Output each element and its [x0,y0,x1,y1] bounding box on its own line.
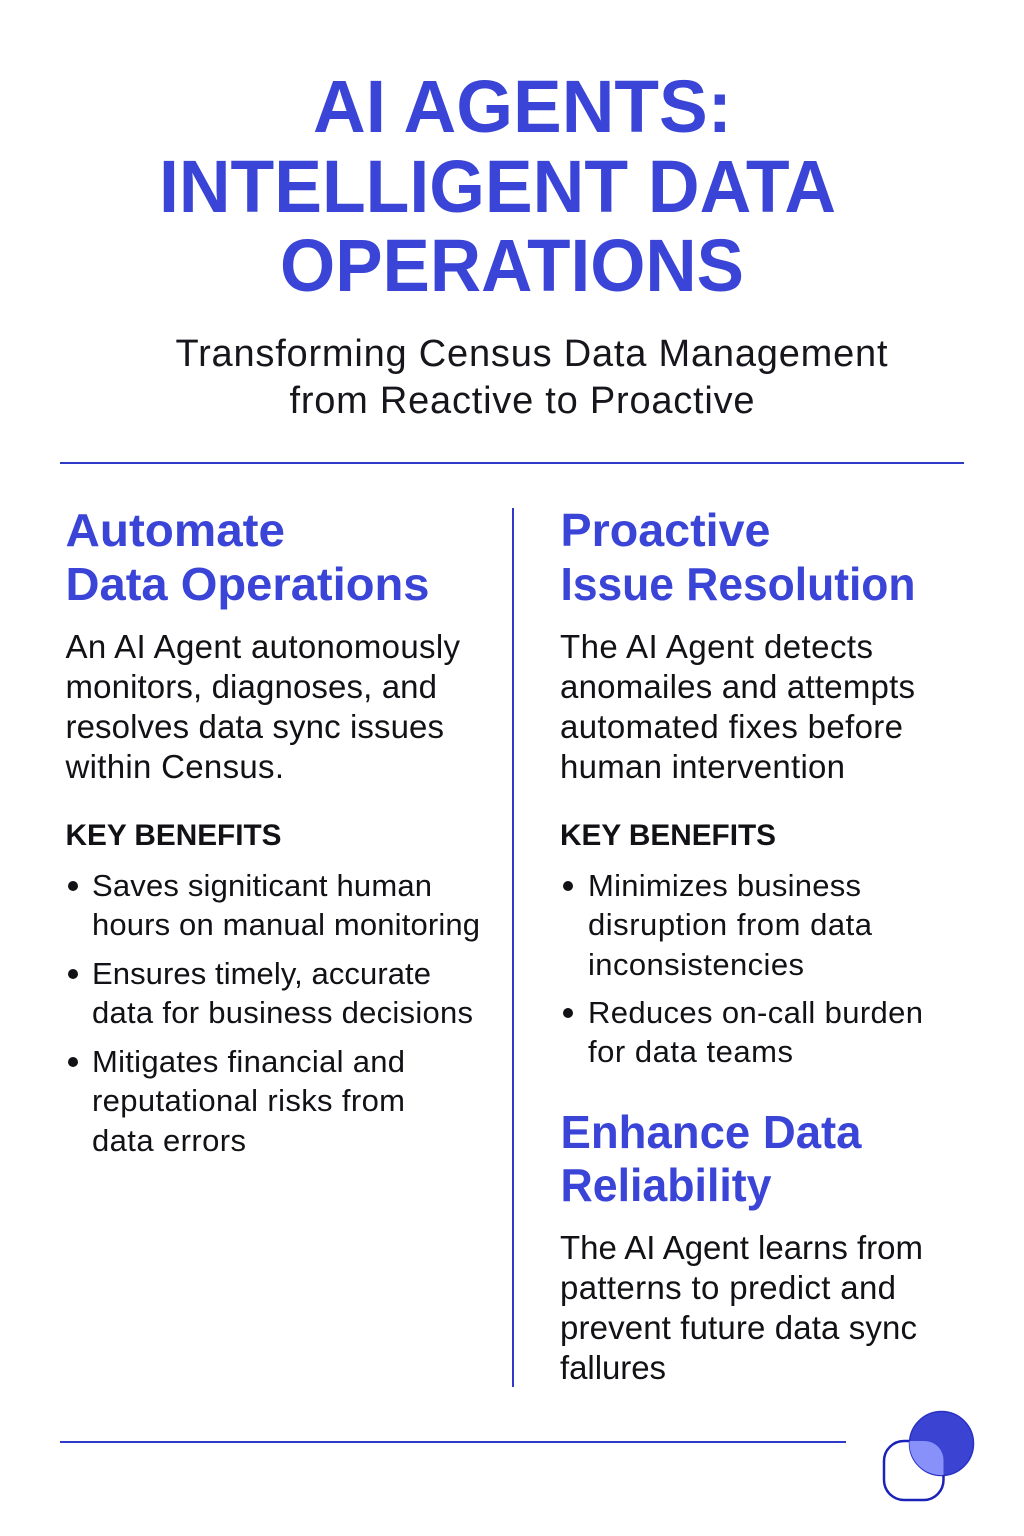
text block: proactive description: automated fixes before [560,708,903,745]
title: OPERATIONS [280,224,744,307]
text block: proactive description: anomailes and attempts [560,668,915,705]
list: left benefits: hours on manual monitoring [92,907,480,942]
heading: automate data operations: Automate [66,504,285,556]
text block: automate description: within Census. [64,748,284,785]
text block: automate description: An AI Agent autonomously [66,628,460,665]
heading: proactive issue resolution: Proactive [560,504,770,556]
title: INTELLIGENT DATA [159,145,836,228]
title: AI AGENTS: [313,65,732,148]
heading: proactive issue resolution [560,504,916,610]
heading: automate data operations: Data Operations [66,558,430,610]
list: left benefits: data for business decisions [92,995,473,1030]
list: right benefits [563,868,923,1069]
subtitle: Transforming Census Data Management [176,333,888,375]
text block: automate description: resolves data sync issues [66,708,444,745]
text block: reliability description: The AI Agent learns from [560,1229,923,1266]
subtitle: from Reactive to Proactive [290,380,754,422]
heading: enhance data reliability [560,1106,862,1211]
list: left benefits [68,868,480,1158]
panel: automate data operations [64,504,480,1158]
text block: proactive description: human intervention [560,748,845,785]
heading: proactive issue resolution: Issue Resolution [560,558,916,610]
icon: overlapping circle and rounded square [884,1412,974,1500]
text block: proactive description [560,628,915,785]
list: right benefits: Reduces on-call burden [588,995,923,1030]
list: left benefits: Ensures timely, accurate [92,956,431,991]
panel: enhance data reliability [560,1106,923,1386]
text block: reliability description: patterns to predict and [560,1269,896,1306]
heading: key benefits right: KEY BENEFITS [560,819,776,852]
heading: enhance data reliability: Enhance Data [560,1106,862,1158]
text block: proactive description: The AI Agent detects [560,628,873,665]
list: left benefits: Saves signiticant human [92,868,432,903]
text block: reliability description [560,1229,923,1386]
list: right benefits: Minimizes business [588,868,861,903]
list: right benefits: disruption from data [588,907,873,942]
list: right benefits: inconsistencies [588,947,804,982]
list: left benefits: Mitigates financial and [92,1044,405,1079]
text block: reliability description: fallures [560,1349,666,1386]
list: left benefits: reputational risks from [92,1083,405,1118]
heading: automate data operations [66,504,430,610]
panel: proactive issue resolution [560,504,923,1069]
text block: automate description: monitors, diagnoses, and [66,668,437,705]
text block: reliability description: prevent future data sync [560,1309,917,1346]
subtitle [176,333,888,422]
heading: enhance data reliability: Reliability [560,1159,772,1211]
list: right benefits: for data teams [588,1034,793,1069]
heading: key benefits left: KEY BENEFITS [66,819,282,852]
title [159,65,836,307]
list: left benefits: data errors [92,1123,246,1158]
text block: automate description [64,628,460,785]
